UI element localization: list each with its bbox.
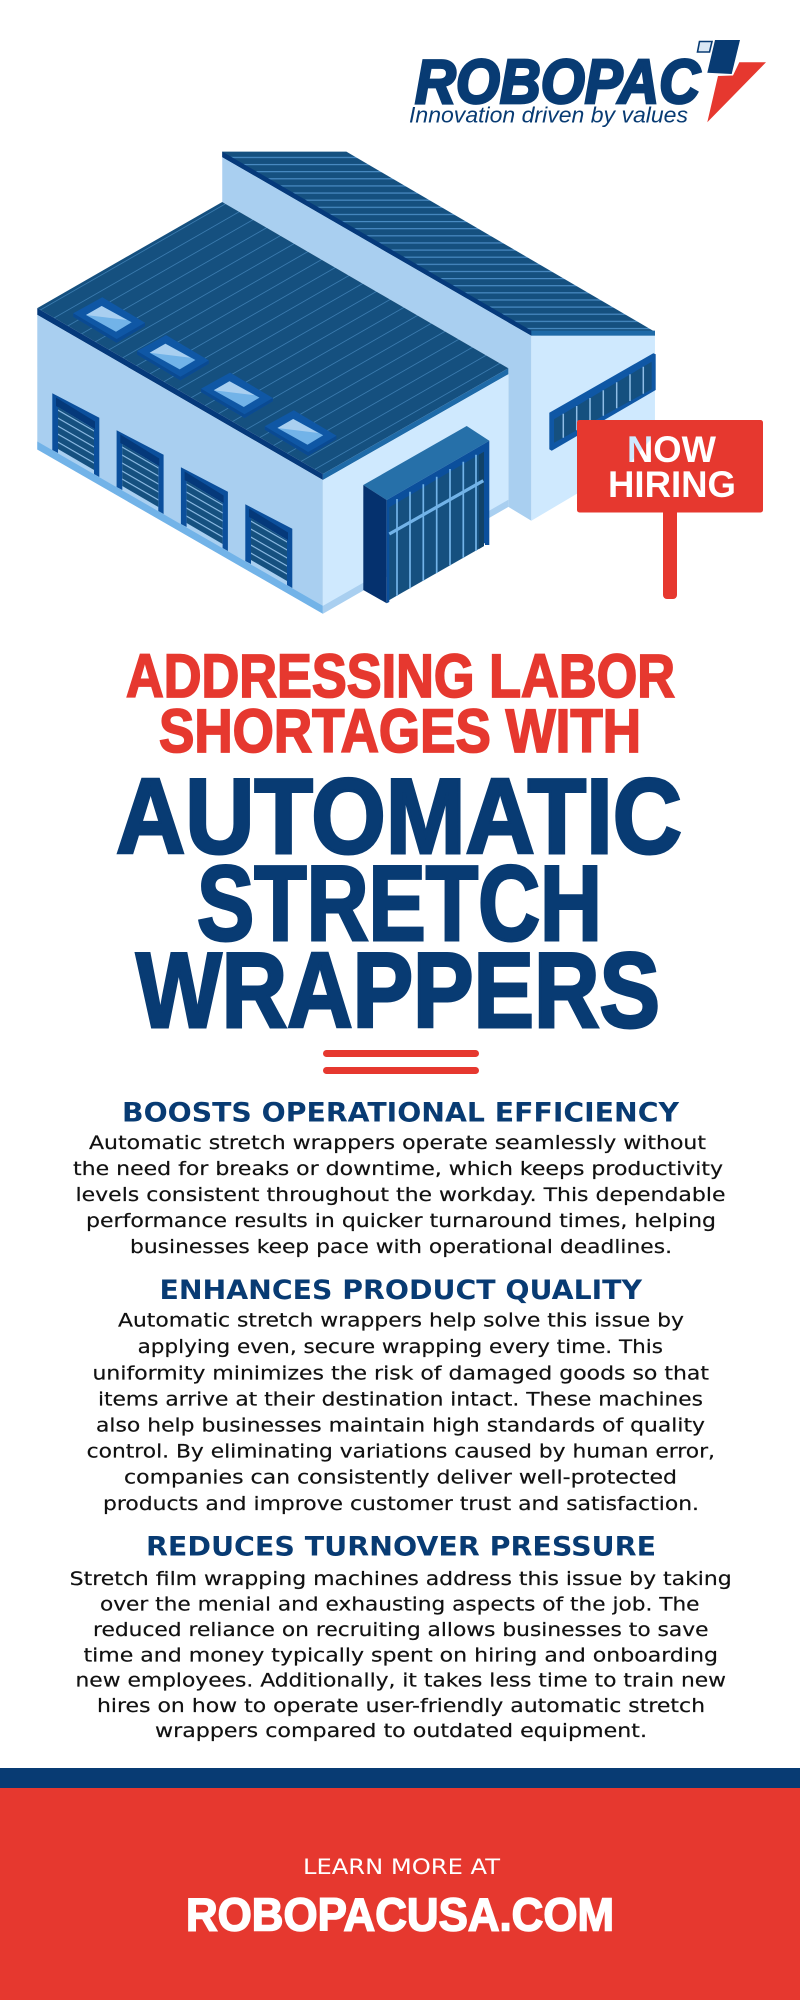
section text [70,1568,732,1742]
section text: businesses keep pace with operational deadlines. [130,1236,672,1258]
section text: new employees. Additionally, it takes less time to train new [76,1670,726,1692]
section text: the need for breaks or downtime, which keeps productivity [73,1158,723,1180]
roll-up door 4 [245,504,292,588]
section text: wrappers compared to outdated equipment. [155,1720,647,1742]
title line: navy [116,756,682,1050]
section text: items arrive at their destination intact. These machines [98,1388,703,1410]
section text: Stretch film wrapping machines address this issue by taking [70,1568,732,1590]
sign: now hiring [577,420,763,599]
section: enhances product quality [87,1275,715,1515]
logo: Robopac [409,40,766,128]
section text: control. By eliminating variations caused by human error, [87,1441,715,1463]
section heading: REDUCES TURNOVER PRESSURE [146,1532,656,1562]
section text [87,1310,715,1515]
right wall [323,374,508,614]
roll-up door 1 [52,393,99,477]
footer url: ROBOPACUSA.COM [186,1888,614,1940]
sign board [577,420,763,512]
section text [73,1132,726,1258]
skylight 3 [201,373,273,418]
upper right wall [531,336,655,521]
section text: companies can consistently deliver well-protected [124,1467,677,1489]
section text: applying even, secure wrapping every time. This [138,1336,663,1358]
section text: time and money typically spent on hiring and onboarding [84,1644,718,1666]
sign text [608,429,736,505]
section heading: ENHANCES PRODUCT QUALITY [160,1275,643,1306]
skylight 2 [137,335,209,380]
title line: navy: AUTOMATIC [116,756,682,876]
skylight 1 [73,297,145,343]
upper window [549,353,656,451]
section text: hires on how to operate user-friendly automatic stretch [97,1695,705,1717]
section text: uniformity minimizes the risk of damaged goods so that [92,1362,709,1384]
footer label: LEARN MORE AT [303,1855,501,1880]
section text: also help businesses maintain high standards of quality [96,1415,705,1437]
section: boosts operational efficiency [73,1098,726,1258]
section text: performance results in quicker turnaround times, helping [86,1210,716,1232]
title line: red [126,642,675,765]
logo tagline: Innovation driven by values [409,103,688,128]
illustration: warehouse building [37,152,656,614]
title line: red: SHORTAGES WITH [159,697,641,765]
title line: red: ADDRESSING LABOR [126,642,675,710]
section text: reduced reliance on recruiting allows businesses to save [93,1619,708,1641]
section heading: BOOSTS OPERATIONAL EFFICIENCY [122,1098,680,1128]
section text: over the menial and exhausting aspects of the job. The [100,1594,700,1616]
sign post [663,505,677,599]
footer panel [0,1788,800,2000]
roll-up door 3 [181,467,228,551]
left wall [37,315,323,614]
section: reduces turnover pressure [70,1532,732,1742]
logo wordmark: ROBOPAC [415,48,701,117]
footer navy band [0,1768,800,1788]
skylight 4 [265,410,336,456]
section text: Automatic stretch wrappers help solve this issue by [118,1310,684,1332]
roll-up door 2 [117,430,164,514]
section text: products and improve customer trust and satisfaction. [103,1493,699,1515]
middle wall band [222,157,531,521]
logo mark: red bolt [707,62,766,122]
large loading door [363,426,489,603]
logo mark: small square [698,42,712,52]
sign text: NOW [627,429,716,470]
sign text: HIRING [608,464,736,505]
logo mark: blue block [707,40,740,74]
section text: levels consistent throughout the workday. This dependable [76,1184,726,1206]
double rule divider [323,1050,479,1074]
section text: Automatic stretch wrappers operate seamlessly without [89,1132,706,1154]
title line: navy: STRETCH [197,843,602,963]
title line: navy: WRAPPERS [136,930,660,1050]
building shell [37,152,655,614]
title [116,642,682,1050]
back roof [222,152,655,336]
main roof [37,202,508,480]
